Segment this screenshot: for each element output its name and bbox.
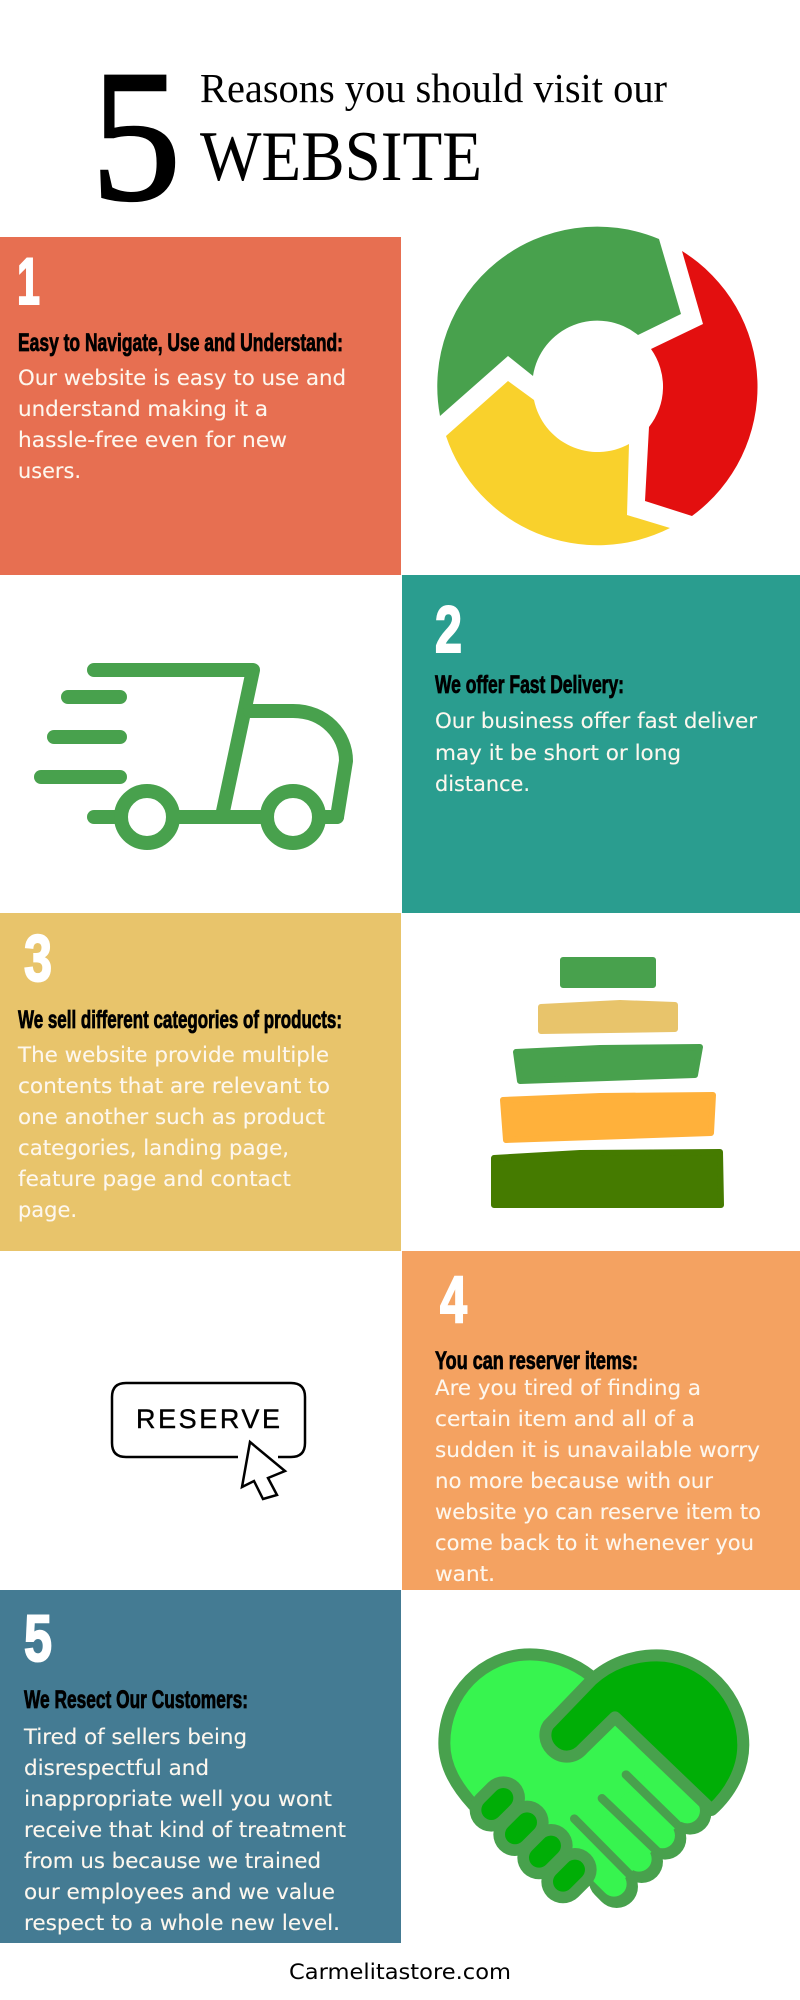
footer: website name: Carmelitastore.com <box>289 1960 511 1984</box>
panel: reason 2: Our business offer fast deliver <box>435 709 757 733</box>
panel: reason 4: You can reserver items: <box>435 1347 638 1375</box>
finger fills <box>583 1780 687 1884</box>
panel: reason 5: inappropriate well you wont <box>24 1787 332 1811</box>
panel: reason 3: one another such as product <box>18 1105 325 1129</box>
panel: reason 4: sudden it is unavailable worry <box>435 1438 760 1462</box>
panel: reason 4: Are you tired of finding a <box>435 1376 701 1400</box>
panel: reason 5 <box>0 1590 401 1943</box>
panel: reason 1: Easy to Navigate, Use and Understand: <box>18 329 343 357</box>
panel: reason 1: 1 <box>17 244 40 318</box>
panel: reason 4: want. <box>435 1562 495 1586</box>
panel: reason 5: Tired of sellers being <box>23 1725 247 1749</box>
panel: reason 3: page. <box>18 1198 77 1222</box>
panel: reason 3: We sell different categories of products: <box>18 1006 342 1034</box>
panel: reason 1 <box>0 237 401 575</box>
icon: stacked pyramid bars <box>494 960 721 1205</box>
panel: reason 4 <box>402 1251 800 1590</box>
dark hand <box>545 1655 743 1810</box>
panel: reason 5: We Resect Our Customers: <box>24 1686 248 1714</box>
panel: reason 1: understand making it a <box>18 397 268 421</box>
finger separators <box>574 1775 683 1878</box>
panel: reason 3 <box>0 913 401 1251</box>
panel: reason 1: Our website is easy to use and <box>18 366 346 390</box>
panel: reason 5: our employees and we value <box>24 1880 335 1904</box>
panel: reason 4: come back to it whenever you <box>435 1531 754 1555</box>
panel: reason 5: 5 <box>24 1601 52 1675</box>
panel: reason 4: certain item and all of a <box>435 1407 695 1431</box>
panel: reason 5: disrespectful and <box>24 1756 209 1780</box>
panel: reason 1: users. <box>18 459 81 483</box>
title: 5 <box>91 31 181 240</box>
finger tip outlines <box>610 1807 690 1887</box>
cuff outlines <box>491 1798 575 1882</box>
cuff fills <box>491 1798 575 1882</box>
panel: reason 4: 4 <box>440 1262 467 1336</box>
icon: reserve button with cursor: RESERVE <box>136 1404 280 1434</box>
panel: reason 3: feature page and contact <box>18 1167 291 1191</box>
panel: reason 3: 3 <box>24 921 52 995</box>
panel: reason 5: respect to a whole new level. <box>24 1911 340 1935</box>
left lobe outline <box>444 1654 592 1805</box>
panel: reason 3: categories, landing page, <box>18 1136 289 1160</box>
panel: reason 3: contents that are relevant to <box>18 1074 330 1098</box>
panel: reason 2: distance. <box>435 772 530 796</box>
icon: delivery truck <box>41 670 346 843</box>
panel: reason 2: may it be short or long <box>435 741 681 765</box>
panel: reason 3: The website provide multiple <box>17 1043 329 1067</box>
panel: reason 2: 2 <box>435 592 462 666</box>
icon: circular arrows pie <box>437 227 758 545</box>
panel: reason 2: We offer Fast Delivery: <box>435 671 624 699</box>
icon: reserve button with cursor <box>112 1383 305 1499</box>
panel: reason 1: hassle-free even for new <box>18 428 287 452</box>
title: WEBSITE <box>200 118 482 196</box>
title <box>91 31 667 240</box>
icon: handshake heart <box>444 1654 743 1887</box>
title: Reasons you should visit our <box>200 65 667 111</box>
panel: reason 4: no more because with our <box>435 1469 713 1493</box>
panel: reason 5: receive that kind of treatment <box>24 1818 346 1842</box>
panel: reason 4: website yo can reserve item to <box>435 1500 761 1524</box>
panel: reason 2 <box>402 575 800 913</box>
panel: reason 5: from us because we trained <box>24 1849 321 1873</box>
light hand and left lobe <box>444 1654 703 1887</box>
